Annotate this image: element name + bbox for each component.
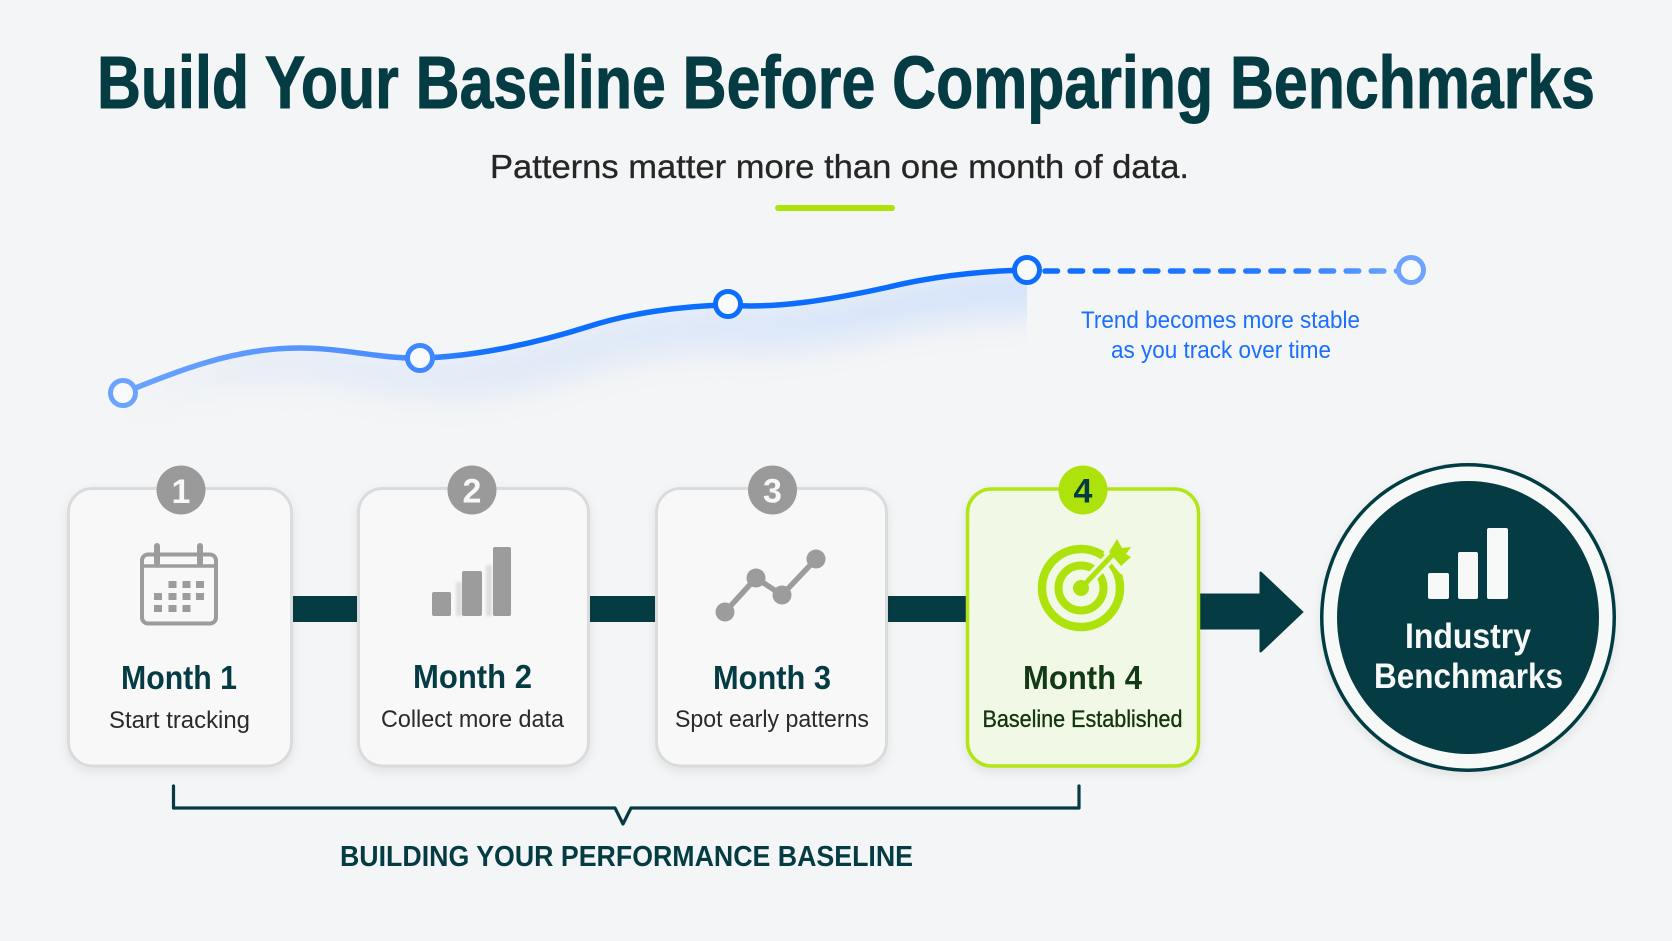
panel: month 1: [68, 466, 292, 766]
area under trend line: [229, 273, 1027, 400]
point: month 2: [408, 346, 432, 370]
solid trend line: [123, 270, 1027, 393]
industry benchmarks circle: [1320, 463, 1616, 772]
connector: month 1 to 2: [291, 596, 359, 622]
month 1 description: Start tracking: [109, 707, 250, 734]
benchmark label: Benchmarks: [1374, 657, 1563, 696]
subtitle: Patterns matter more than one month of data.: [490, 148, 1189, 185]
badge 2: 2: [463, 472, 481, 510]
month 4 heading: Month 4: [1023, 659, 1143, 696]
panel: month 4: [968, 466, 1198, 766]
trend annotation: Trend becomes more stable: [1081, 307, 1360, 334]
icon: line chart: [716, 550, 826, 622]
badge 4: [1058, 466, 1108, 514]
panel: month 2: [358, 466, 588, 766]
benchmark label: Industry: [1405, 617, 1531, 656]
month 2 heading: Month 2: [413, 658, 532, 695]
dashed projection line: [1045, 268, 1400, 274]
month 3 description: Spot early patterns: [675, 706, 869, 733]
connector: month 2 to 3: [588, 596, 657, 622]
connector: month 3 to 4: [886, 596, 968, 622]
badge 4: 4: [1074, 472, 1093, 510]
point: month 1: [110, 380, 136, 406]
bracket: [174, 786, 1079, 824]
trend annotation: [1081, 307, 1360, 364]
trend line chart: [110, 258, 1424, 410]
trend annotation: as you track over time: [1111, 337, 1331, 364]
point: month 3: [716, 292, 740, 316]
month 2 description: Collect more data: [381, 706, 564, 733]
month 3 heading: Month 3: [713, 659, 831, 696]
accent underline: [775, 205, 895, 211]
benchmark label: [1374, 617, 1563, 696]
icon: calendar: [142, 546, 216, 624]
month 4 description: Baseline Established: [982, 706, 1182, 733]
point: month 4: [1014, 258, 1040, 282]
badge 1: [156, 466, 206, 514]
badge 2: [448, 466, 496, 514]
panel: month 3: [656, 466, 886, 766]
badge 1: 1: [172, 473, 190, 511]
icon: bar chart: [432, 547, 511, 616]
badge 3: [748, 466, 797, 514]
icon: benchmark bars: [1428, 528, 1508, 599]
arrow to benchmarks: [1198, 572, 1303, 652]
bracket label: BUILDING YOUR PERFORMANCE BASELINE: [340, 841, 913, 873]
point: projected: [1398, 258, 1424, 282]
month 1 heading: Month 1: [121, 659, 237, 696]
badge 3: 3: [763, 472, 782, 510]
icon: target with arrow: [1042, 538, 1136, 627]
